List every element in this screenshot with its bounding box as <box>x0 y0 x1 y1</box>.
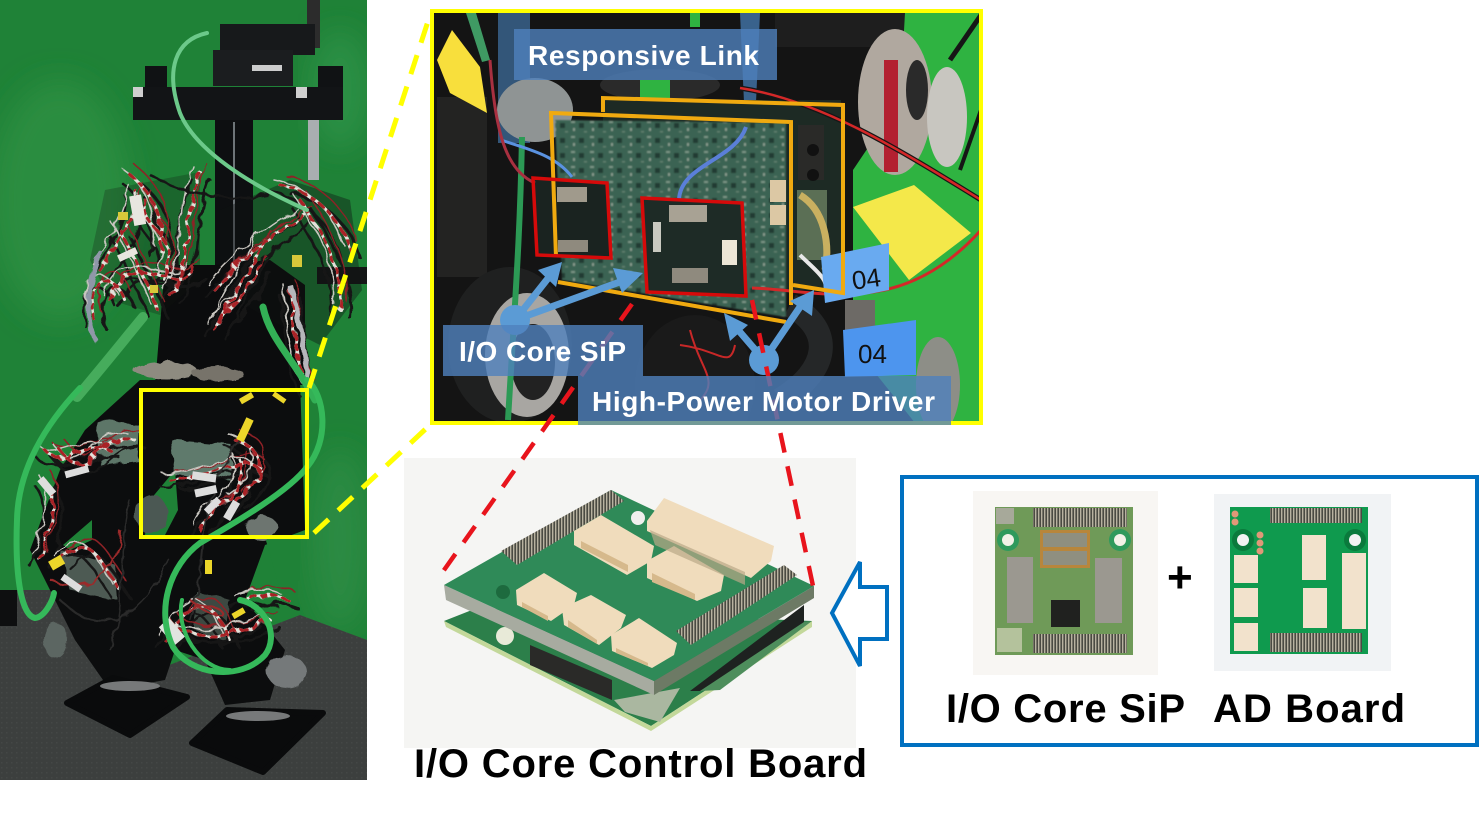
photo: I/O Core SiP <box>973 491 1158 675</box>
support beam and column <box>133 87 343 120</box>
photo: I/O Core Control Board <box>404 458 856 748</box>
circuit boards on robot <box>43 362 307 688</box>
blue cable tags: 04 <box>850 262 883 296</box>
I/O core SiP boards <box>533 178 611 258</box>
blue cable tags: 04 <box>858 339 887 369</box>
panel: components <box>902 477 1477 745</box>
blue cable tags <box>821 243 916 377</box>
green background <box>853 13 981 423</box>
photo: humanoid robot on green screen <box>0 0 370 780</box>
front motor driver board <box>555 120 786 317</box>
label: Responsive Link <box>514 29 777 80</box>
caption: I/O Core Control Board: I/O Core Control Board <box>414 742 867 786</box>
label: I/O Core SiP <box>443 325 643 376</box>
blue arrows from labels <box>500 262 814 375</box>
arrow: hollow blue block arrow <box>832 562 887 666</box>
label: I/O Core SiP: I/O Core SiP <box>459 336 626 367</box>
overhead fan and camera <box>307 0 320 48</box>
label: High-Power Motor Driver: High-Power Motor Driver <box>592 386 935 417</box>
green coolant tubes <box>17 33 322 672</box>
board-to-board connectors <box>501 490 624 565</box>
lower board <box>444 608 812 726</box>
robot feet <box>67 678 187 735</box>
label: Responsive Link: Responsive Link <box>528 40 759 71</box>
connector openings <box>522 541 695 666</box>
upper board <box>444 585 654 695</box>
caption: AD Board: AD Board <box>1213 687 1405 731</box>
yellow tape <box>437 30 487 113</box>
highlight box on robot <box>141 390 307 537</box>
rear motor driver board <box>603 100 841 290</box>
robot body silhouette <box>155 260 305 385</box>
caption: I/O Core SiP: I/O Core SiP <box>946 687 1185 731</box>
red dashed connector lines <box>437 300 813 586</box>
green rope <box>508 137 522 420</box>
photo: AD Board <box>1214 494 1391 671</box>
pulleys <box>858 29 932 175</box>
header between boards <box>530 645 612 700</box>
plus sign: + <box>1167 553 1193 602</box>
yellow frame of close-up <box>432 11 981 423</box>
white connectors <box>516 498 774 668</box>
red outlines: I/O core SiP <box>533 178 746 296</box>
orange outlines: motor driver boards <box>551 98 843 322</box>
label: High-Power Motor Driver <box>578 376 951 425</box>
wiring harnesses <box>31 163 360 650</box>
wires in close-up <box>490 15 981 400</box>
wheels <box>448 267 572 423</box>
photo: I/O core board mounted in robot <box>432 11 981 455</box>
zoom connector lines: yellow <box>309 12 431 533</box>
white and yellow connectors <box>37 194 302 646</box>
